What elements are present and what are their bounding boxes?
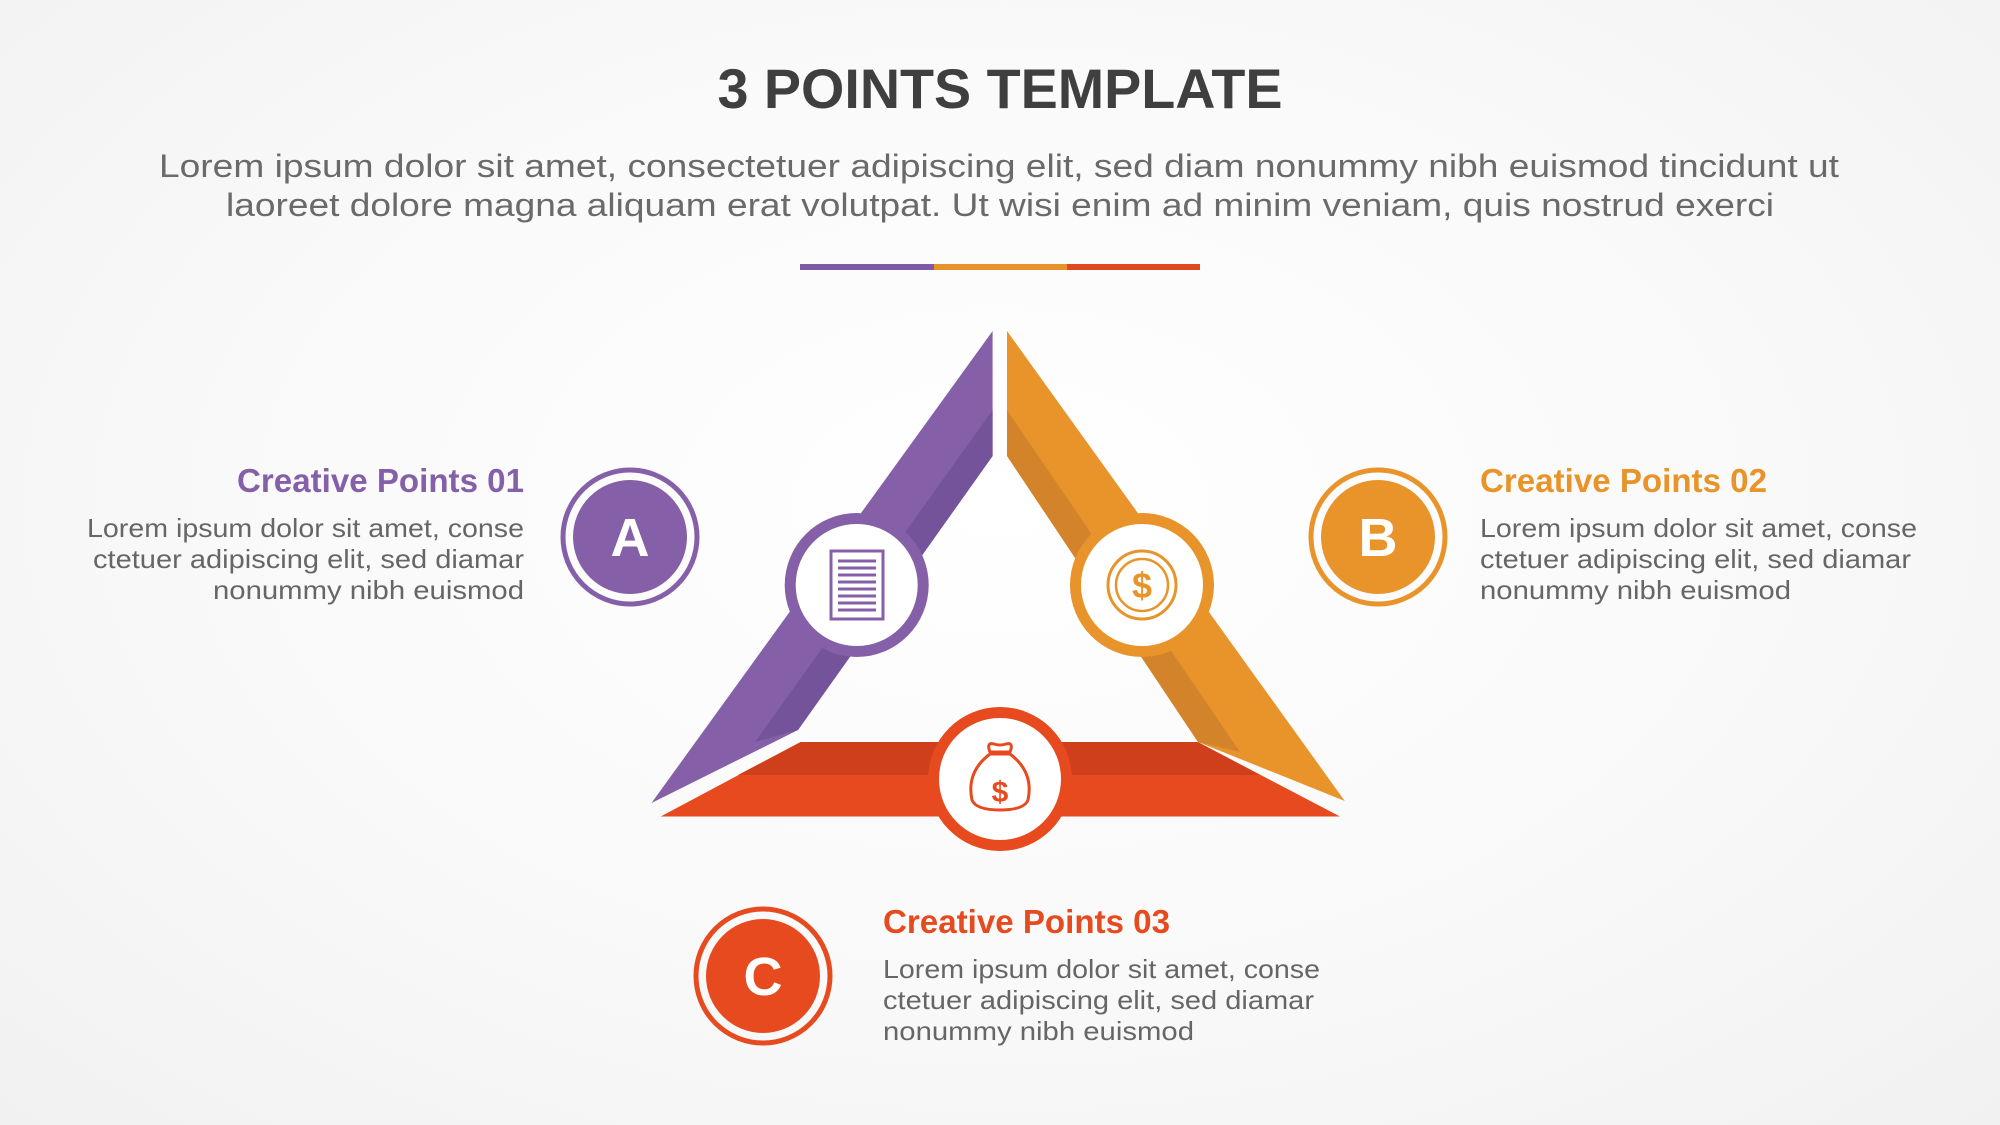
badge B: B: [1358, 508, 1398, 568]
triangle: orange side: [1007, 331, 1345, 801]
text block: point 01: Lorem ipsum dolor sit amet, conse: [87, 513, 524, 543]
triangle: purple side: [652, 331, 993, 803]
text block: point 03: Lorem ipsum dolor sit amet, conse: [883, 954, 1320, 984]
text block: point 02: ctetuer adipiscing elit, sed diamar: [1480, 544, 1911, 574]
icon circle: coin: $: [1132, 565, 1152, 606]
icon circle: document: [785, 513, 929, 657]
badge C: C: [744, 947, 782, 1007]
text block: point 03: Creative Points 03: [883, 903, 1170, 940]
badge B: [1311, 470, 1445, 604]
text block: point 03: [883, 903, 1320, 1046]
subtitle: [159, 148, 1839, 223]
icon circle: money bag: [928, 707, 1072, 851]
text block: point 03: ctetuer adipiscing elit, sed diamar: [883, 985, 1314, 1015]
text block: point 02: Lorem ipsum dolor sit amet, conse: [1480, 513, 1917, 543]
subtitle: Lorem ipsum dolor sit amet, consectetuer adipiscing elit, sed diam nonummy nibh euismod tincidunt ut: [159, 148, 1839, 184]
icon circle: money bag: $: [992, 776, 1009, 809]
badge A: [563, 470, 697, 604]
text block: point 02: nonummy nibh euismod: [1480, 575, 1791, 605]
text block: point 02: [1480, 462, 1917, 605]
color divider: [800, 264, 1200, 270]
text block: point 01: [87, 462, 524, 605]
badge C: [696, 909, 830, 1043]
text block: point 02: Creative Points 02: [1480, 462, 1767, 499]
icon circle: coin: [1070, 513, 1214, 657]
text block: point 01: Creative Points 01: [237, 462, 524, 499]
triangle: red base: [661, 742, 1340, 816]
subtitle: laoreet dolore magna aliquam erat volutpat. Ut wisi enim ad minim veniam, quis nostrud exerci: [226, 187, 1774, 223]
text block: point 01: nonummy nibh euismod: [213, 575, 524, 605]
title: 3 POINTS TEMPLATE: [718, 57, 1282, 120]
badge A: A: [610, 508, 650, 568]
text block: point 03: nonummy nibh euismod: [883, 1016, 1194, 1046]
text block: point 01: ctetuer adipiscing elit, sed diamar: [93, 544, 524, 574]
